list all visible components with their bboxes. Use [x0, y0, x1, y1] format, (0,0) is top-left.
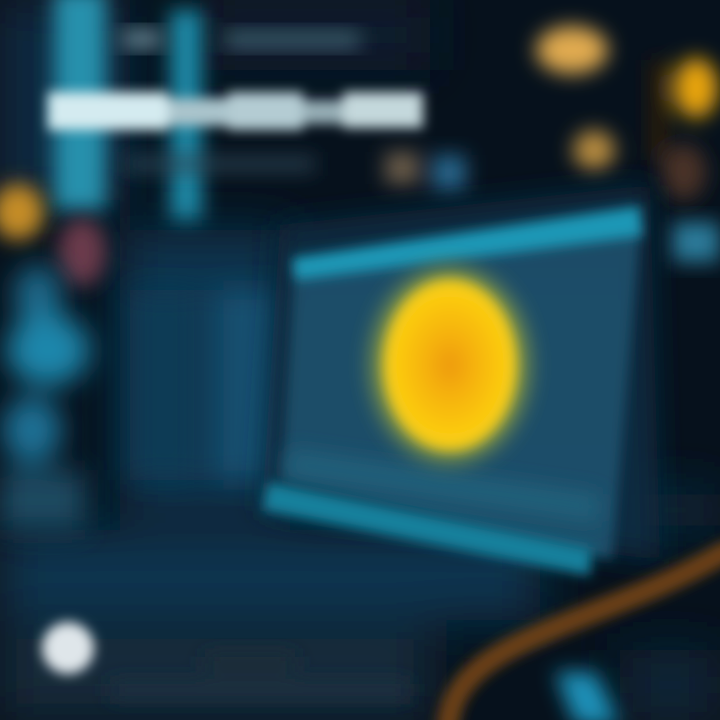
orange cable: [448, 552, 720, 720]
screen lower stripes: [284, 450, 600, 522]
screen face: [282, 225, 640, 560]
screen top bar: [292, 206, 642, 280]
right cyan block: [672, 222, 720, 262]
lower keyboard blur: [110, 655, 410, 698]
white bokeh dot: [42, 622, 94, 674]
subheading blur: [125, 152, 466, 191]
yellow coin: [383, 279, 517, 451]
cyan light bottom: [555, 672, 620, 720]
amber bokeh lights: [0, 26, 718, 240]
screen bottom bar: [262, 482, 592, 576]
red bokeh light: [58, 218, 106, 286]
laptop screen: [262, 185, 660, 576]
top small heading bars: [122, 30, 360, 48]
screen halo: [262, 185, 660, 560]
mid laptop panel: [130, 290, 280, 480]
left teal vertical bars: [54, 0, 202, 220]
main white heading blur: [48, 92, 423, 130]
coin glow: [370, 267, 530, 463]
left blue bokeh lights: [0, 265, 90, 530]
